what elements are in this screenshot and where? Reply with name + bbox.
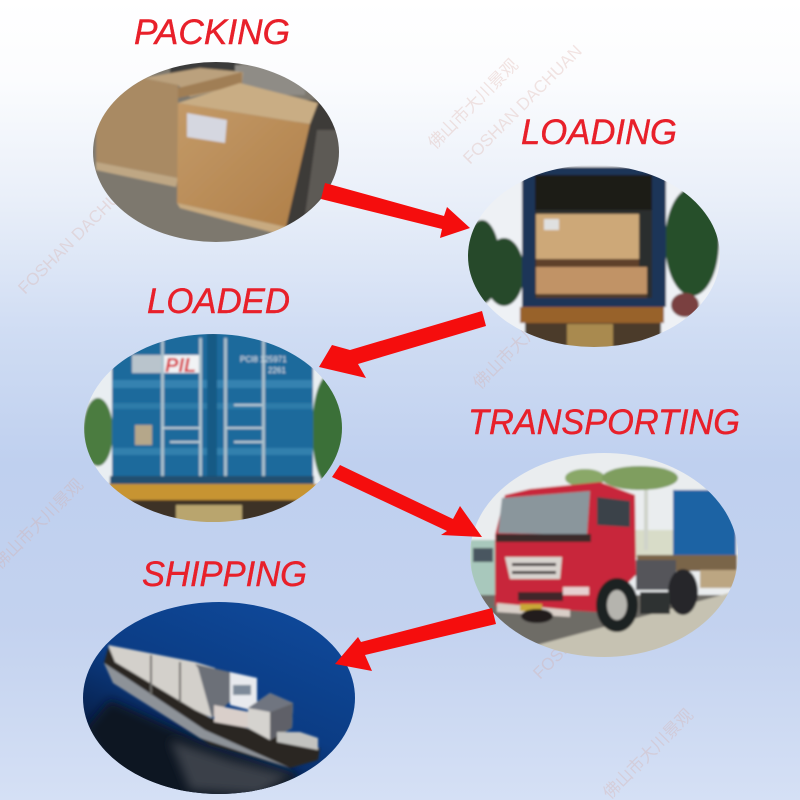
watermark: 佛山市大川: [469, 319, 543, 393]
heading: transporting: TRANSPORTING: [468, 403, 740, 442]
watermark: FOSHAN DACHUAN: [529, 557, 656, 683]
photo: loaded container: PCI8 125971: [240, 355, 287, 364]
arrow: transporting to shipping: [335, 608, 496, 671]
heading: shipping: SHIPPING: [142, 555, 307, 594]
photo: loaded container: 2261: [268, 366, 286, 375]
watermark: FOSHAN DACHUAN: [14, 172, 141, 298]
watermark: 佛山市大川景观: [599, 705, 697, 800]
photo: loading container: [464, 160, 725, 350]
photo: red truck: [465, 450, 745, 660]
watermark: FOSHAN DACHUAN: [459, 42, 586, 168]
heading: packing: PACKING: [134, 13, 290, 52]
arrow: packing to loading: [321, 183, 470, 238]
watermark: 佛山市大川景观: [424, 55, 522, 153]
photo: container ship: [80, 598, 360, 800]
photo: loaded container: PIL: [165, 355, 196, 377]
heading: loading: LOADING: [521, 113, 677, 152]
heading: loaded: LOADED: [147, 282, 290, 321]
arrow: loaded to transporting: [332, 465, 482, 537]
photo: packing crates: [90, 58, 342, 246]
photo: loaded container: [80, 330, 348, 526]
arrow: loading to loaded: [319, 311, 486, 378]
